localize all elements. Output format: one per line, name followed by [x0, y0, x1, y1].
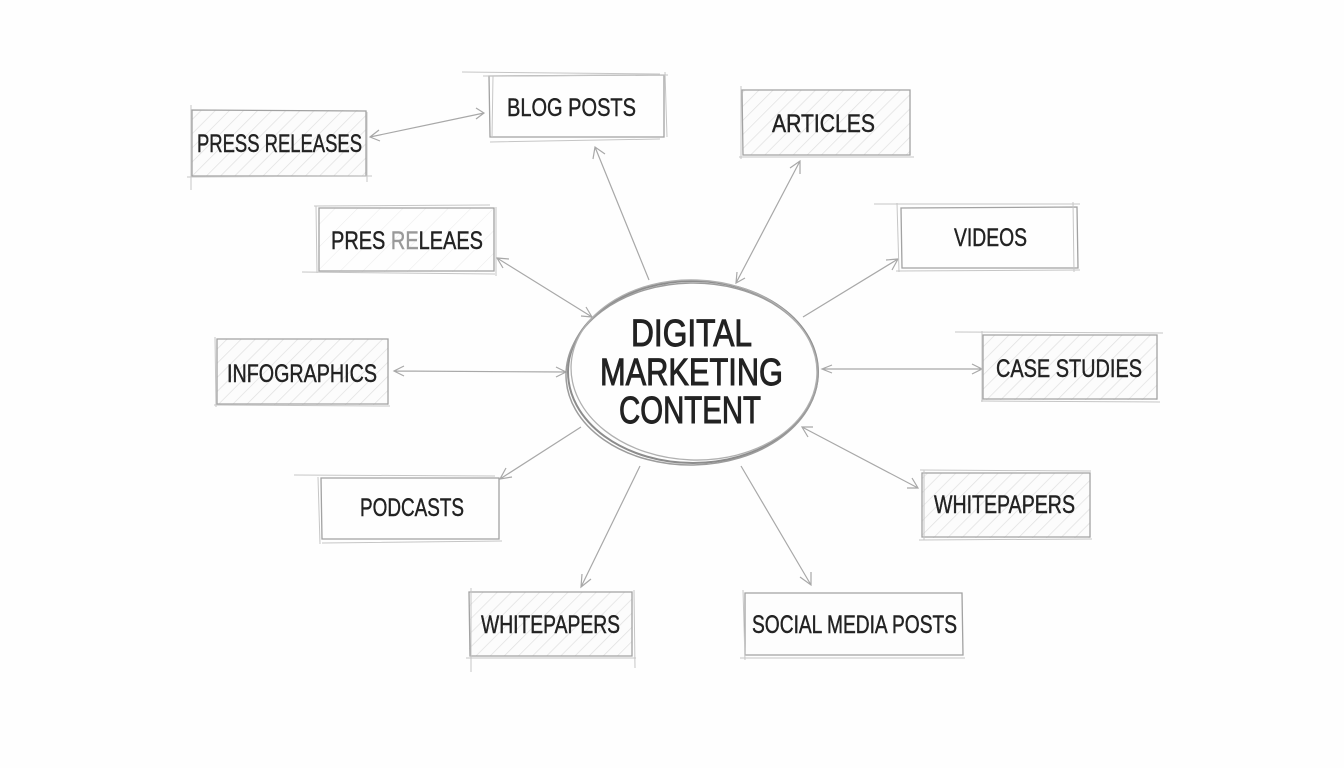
box: whitepapers bottom: WHITEPAPERS: [481, 611, 620, 639]
box: press releases middle: [302, 205, 496, 276]
box: blog posts: BLOG POSTS: [507, 94, 636, 122]
center ellipse: digital marketing content: MARKETING: [600, 352, 783, 394]
box: press releases middle: PRES RELEAES: [331, 227, 483, 255]
box: whitepapers right: WHITEPAPERS: [934, 491, 1075, 519]
box: case studies: [955, 331, 1163, 402]
center ellipse: digital marketing content: DIGITAL: [631, 313, 752, 355]
box: articles: [739, 86, 914, 159]
box: articles: ARTICLES: [772, 110, 875, 138]
arrow: centre to press releases middle: [497, 258, 592, 317]
arrow: centre to case studies: [822, 364, 982, 374]
box: case studies: CASE STUDIES: [996, 355, 1142, 383]
box: whitepapers right: [919, 470, 1092, 540]
box: whitepapers bottom: [466, 588, 636, 672]
arrow: centre to infographics: [394, 366, 566, 377]
box: videos: VIDEOS: [954, 224, 1027, 252]
arrow: centre to whitepapers bottom: [581, 466, 640, 587]
box: social media posts: [740, 590, 965, 660]
arrow: centre to articles: [736, 161, 800, 283]
box: podcasts: [294, 475, 502, 544]
box: videos: [874, 202, 1080, 272]
arrow: centre to whitepapers right: [802, 427, 918, 488]
box: press releases left: [187, 105, 372, 190]
arrow: centre to podcasts: [500, 427, 581, 479]
arrow: press releases to blog posts: [370, 108, 484, 141]
arrow: centre to videos: [803, 259, 898, 317]
center ellipse: digital marketing content: CONTENT: [619, 390, 761, 432]
center ellipse: digital marketing content: [564, 276, 820, 467]
box: infographics: INFOGRAPHICS: [227, 360, 377, 388]
box: infographics: [214, 337, 390, 407]
box: podcasts: PODCASTS: [360, 494, 464, 522]
box: press releases left: PRESS RELEASES: [197, 130, 362, 158]
arrow: centre to blog posts: [593, 147, 649, 280]
box: social media posts: SOCIAL MEDIA POSTS: [752, 611, 957, 639]
box: blog posts: [462, 72, 668, 142]
arrow: centre to social media posts: [741, 466, 811, 585]
